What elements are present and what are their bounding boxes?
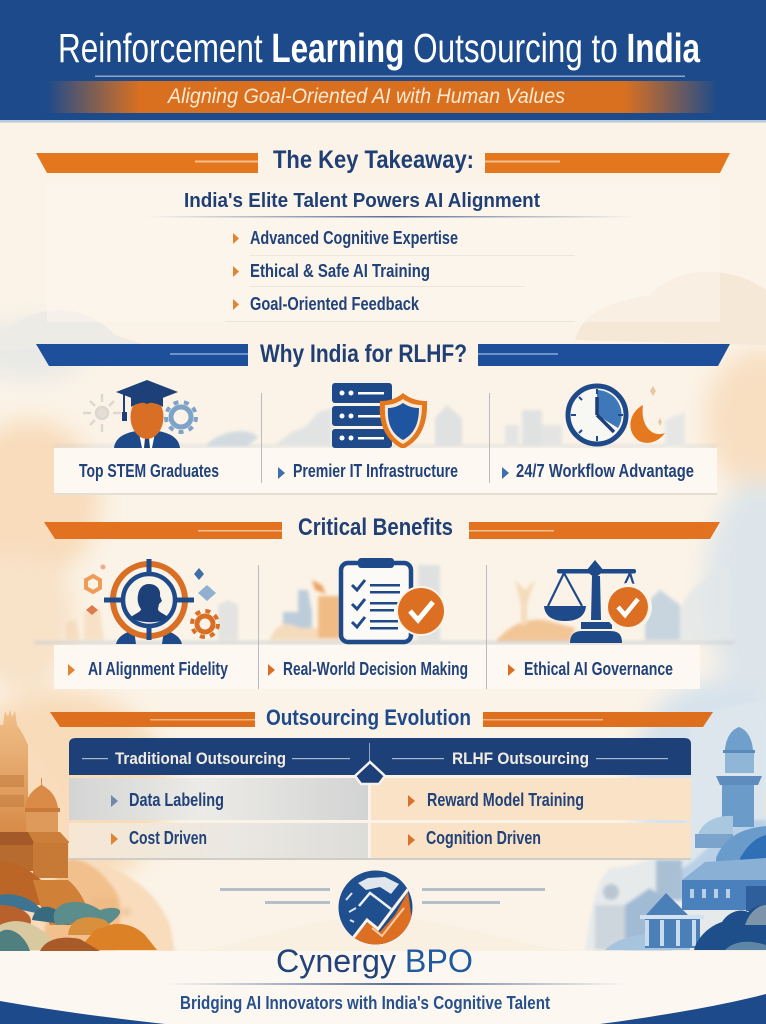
feature card: AI Alignment Fidelity xyxy=(88,659,228,679)
illustration: right blue cityscape xyxy=(585,700,766,950)
footer hill and band xyxy=(180,917,590,952)
banner: the key takeaway: The Key Takeaway: xyxy=(273,146,474,174)
feature card: Premier IT Infrastructure xyxy=(293,461,458,481)
pale skyline background xyxy=(54,405,717,447)
feature card xyxy=(54,393,717,495)
takeaway list xyxy=(225,228,575,322)
panel: key takeaway xyxy=(36,146,730,322)
left column cells: Cost Driven xyxy=(129,828,207,848)
logo xyxy=(220,870,545,950)
subtitle ribbon xyxy=(46,81,718,113)
icon: target person xyxy=(86,559,218,644)
pale skyline background xyxy=(34,565,734,644)
background haze xyxy=(0,272,766,890)
takeaway list: Goal-Oriented Feedback xyxy=(250,294,420,314)
icon: graduate xyxy=(83,380,196,448)
panel: why india for RLHF xyxy=(36,340,730,495)
feature card: 24/7 Workflow Advantage xyxy=(516,461,694,481)
banner: why india: Why India for RLHF? xyxy=(260,340,467,368)
comparison table header: RLHF Outsourcing xyxy=(452,749,589,768)
takeaway list: Ethical & Safe AI Training xyxy=(250,261,430,281)
takeaway list: Advanced Cognitive Expertise xyxy=(250,228,458,248)
feature card: Real-World Decision Making xyxy=(283,659,468,679)
icon: clipboard and badge xyxy=(341,558,446,642)
heading: elite talent: India's Elite Talent Powers AI Alignment xyxy=(184,190,540,212)
feature card xyxy=(54,565,700,689)
icon: clock and moon xyxy=(568,386,665,444)
panel: critical benefits xyxy=(34,514,734,689)
footer blue curves xyxy=(0,994,766,1024)
header band xyxy=(0,0,766,122)
comparison table header xyxy=(69,738,691,775)
table: outsourcing evolution xyxy=(50,705,713,860)
left column cells xyxy=(69,778,368,858)
banner: outsourcing evolution xyxy=(50,705,713,730)
banner: outsourcing evolution: Outsourcing Evolution xyxy=(266,705,471,730)
icon: scales and badge xyxy=(544,560,652,643)
banner: critical benefits xyxy=(44,514,720,541)
tagline: Bridging AI Innovators with India's Cognitive Talent xyxy=(180,993,550,1013)
banner: critical benefits: Critical Benefits xyxy=(298,514,453,541)
illustration: left orange cityscape xyxy=(0,710,175,952)
center diamond xyxy=(355,762,385,784)
feature card: Top STEM Graduates xyxy=(79,461,219,481)
right column cells xyxy=(371,778,691,858)
right column cells: Reward Model Training xyxy=(427,790,584,810)
right column cells: Cognition Driven xyxy=(426,828,541,848)
feature card: Ethical AI Governance xyxy=(524,659,673,679)
left column cells: Data Labeling xyxy=(129,790,224,810)
banner: the key takeaway xyxy=(36,146,730,174)
footer xyxy=(0,870,766,1024)
subtitle ribbon: Aligning Goal-Oriented AI with Human Values xyxy=(166,85,565,108)
title: Reinforcement Learning Outsourcing to India xyxy=(58,25,701,71)
icon: server and shield xyxy=(332,383,427,449)
comparison table header: Traditional Outsourcing xyxy=(115,749,286,768)
banner: why india xyxy=(36,340,730,368)
brand name: Cynergy BPO xyxy=(276,943,473,979)
